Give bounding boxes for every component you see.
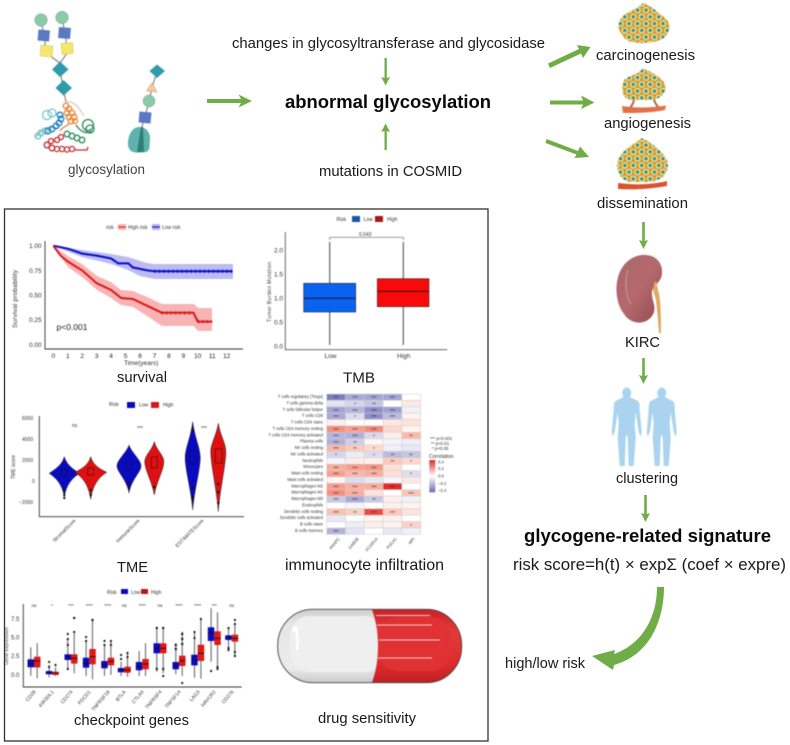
legend: checkpoint: Risk	[107, 590, 117, 596]
row labels: Macrophages M0	[291, 496, 324, 501]
significance stars: ***	[333, 440, 339, 445]
significance stars: ***	[333, 427, 339, 432]
significance stars: ***	[371, 466, 377, 470]
column labels: FCGR1A	[364, 536, 379, 552]
chart: checkpoint gene boxplots: 7.5	[11, 617, 20, 623]
row labels: T cells follicular helper	[283, 407, 324, 412]
significance stars: *	[373, 452, 375, 458]
icon: carcinogenesis cell cluster	[618, 3, 670, 43]
significance stars: ***	[352, 466, 358, 470]
boxes: TNFRSF18	[101, 640, 114, 676]
significance stars: ***	[371, 484, 377, 490]
gene labels	[25, 689, 236, 713]
significance labels: ns	[229, 603, 235, 608]
violins: ESTIMATEScore	[185, 422, 226, 512]
significance stars: ***	[333, 484, 339, 490]
significance labels: ****	[175, 603, 183, 608]
significance stars: **	[353, 446, 357, 451]
chart: survival curves: 10	[194, 353, 202, 360]
boxes: HAVCR2	[208, 608, 221, 672]
significance stars: ***	[371, 414, 377, 419]
significance stars: **	[409, 452, 413, 458]
row labels: T cells CD4 memory resting	[273, 426, 324, 431]
chart: survival curves: 4	[109, 353, 113, 360]
arrow: to angiogenesis	[550, 96, 594, 109]
significance stars: ***	[352, 472, 358, 476]
arrow: to carcinogenesis	[548, 45, 590, 68]
row labels: T cells regulatory (Tregs)	[278, 394, 324, 399]
legend: survival	[106, 224, 181, 231]
chart: TME violin plot: ***	[201, 426, 207, 432]
boxes: CD276	[225, 619, 238, 657]
chart: checkpoint gene boxplots: 5.0	[11, 636, 20, 642]
chart: TME violin plot: StromalScore	[52, 518, 78, 544]
label: drug sensitivity: drug sensitivity	[318, 711, 417, 727]
row labels: Mast cells activated	[287, 477, 324, 482]
significance labels	[32, 603, 235, 608]
significance labels: ***	[212, 603, 217, 608]
significance stars: ***	[333, 395, 339, 400]
chart: survival curves: 8	[167, 353, 171, 360]
curve: high risk	[53, 246, 212, 322]
label: TMB: TMB	[343, 370, 375, 386]
label: carcinogenesis: carcinogenesis	[596, 48, 695, 64]
significance stars: ***	[390, 484, 395, 490]
significance stars: **	[372, 497, 376, 502]
significance stars: ***	[352, 491, 358, 496]
significance stars	[333, 395, 414, 534]
significance stars: ***	[352, 427, 358, 432]
chart: survival curves: Time(years)	[124, 360, 158, 367]
icon: drug capsule	[277, 609, 462, 683]
icon: O-glycan on barrel protein	[128, 64, 165, 153]
significance stars: ***	[390, 414, 395, 419]
legend: TME: Risk	[109, 402, 119, 408]
significance stars: ***	[333, 510, 339, 515]
legend: significance	[430, 436, 453, 451]
label: TME: TME	[117, 560, 148, 576]
chart: survival curves: 0.50	[29, 292, 42, 300]
legend: TMB	[336, 216, 398, 223]
significance stars: ***	[333, 497, 339, 502]
violins: StromalScore	[49, 457, 107, 499]
column labels: GAB2B	[347, 536, 360, 550]
gene labels: TNFRSF18	[91, 689, 112, 713]
chart: survival curves: 12	[223, 353, 231, 360]
gene labels: BTLA	[115, 689, 128, 703]
column labels	[328, 536, 416, 552]
significance stars: ***	[371, 472, 377, 476]
label: clustering: clustering	[616, 471, 678, 487]
legend: checkpoint: Low	[131, 590, 141, 596]
arrow: to signature	[641, 495, 650, 522]
curve: low risk	[53, 246, 232, 271]
label: glycosylation: glycosylation	[68, 162, 145, 177]
row labels: T cells CD4 naive	[291, 420, 324, 424]
significance stars: *	[373, 434, 375, 438]
significance stars: ***	[352, 395, 358, 400]
gene labels: CTLA4	[131, 689, 146, 705]
legend: survival: High risk	[128, 225, 148, 231]
significance stars: ***	[371, 408, 377, 413]
legend: checkpoint	[107, 589, 162, 596]
gene labels: CD28	[25, 689, 38, 703]
significance stars: *	[410, 459, 412, 464]
legend: TME: Low	[139, 402, 149, 408]
chart: TME violin plot: ns	[72, 423, 78, 429]
significance stars: *	[354, 402, 356, 406]
chart: survival curves: 0.25	[29, 317, 42, 324]
row labels: Mast cells resting	[291, 471, 324, 476]
boxes: CD274	[64, 617, 78, 673]
chart: survival curves: 0.00	[29, 342, 42, 349]
row labels: Plasma cells	[300, 439, 323, 444]
legend: significance: ** p<0.01	[431, 441, 450, 446]
icon: glycosylated protein with branched glycan	[35, 11, 94, 152]
arrow: to clustering	[639, 358, 648, 384]
chart: survival curves: 1.00	[29, 243, 42, 250]
row labels: T cells gamma delta	[286, 400, 324, 405]
significance stars: ***	[333, 434, 339, 438]
legend: checkpoint: High	[151, 590, 162, 596]
gene labels: HAVCR2	[200, 689, 218, 709]
arrow: curved to high/low risk	[592, 587, 664, 670]
significance stars: **	[353, 440, 357, 445]
chart: checkpoint gene boxplots: 0.0	[11, 673, 20, 679]
legend: correlation colour bar: 0.2	[438, 466, 444, 471]
chart: survival curves: 1	[66, 353, 70, 360]
heading: glycogene-related signature: glycogene-related signature	[524, 525, 771, 546]
significance stars: **	[353, 510, 357, 515]
label: angiogenesis: angiogenesis	[604, 116, 691, 132]
chart: TMB boxplot: 1.5	[274, 272, 283, 278]
y axis title: TME score	[11, 455, 17, 479]
significance labels: ****	[139, 603, 146, 608]
y axis title: Tumor Burden Mutation	[267, 262, 273, 322]
legend: correlation colour bar: 0.0	[438, 474, 444, 478]
significance stars: ***	[333, 529, 339, 534]
violins: ImmuneScore	[117, 442, 164, 495]
boxes: LAG3	[191, 618, 204, 679]
row labels: Neutrophils	[302, 458, 323, 463]
label: survival: survival	[117, 370, 167, 386]
label: immunocyte infiltration: immunocyte infiltration	[285, 557, 444, 574]
chart: checkpoint gene boxplots: 2.5	[11, 654, 20, 660]
chart: survival curves: 11	[209, 353, 216, 360]
gene labels: TNFSF14	[164, 689, 183, 710]
row labels: B cells memory	[295, 528, 324, 533]
chart: checkpoint gene boxplots	[4, 589, 242, 713]
row labels: Dendritic cells activated	[280, 515, 324, 520]
boxes: PDCD1	[83, 619, 96, 679]
chart: TME violin plot: ***	[137, 426, 143, 432]
significance labels: ****	[104, 603, 111, 608]
heading: abnormal glycosylation: abnormal glycosylation	[285, 91, 491, 112]
chart: TMB boxplot: Low	[324, 353, 337, 360]
legend: TMB: Risk	[336, 217, 347, 223]
legend: correlation colour bar	[429, 454, 454, 493]
chart: survival curves: 6	[138, 353, 142, 360]
gene labels: CD274	[60, 689, 75, 705]
significance stars: *	[335, 452, 337, 458]
significance stars: **	[372, 402, 376, 406]
significance labels: ns	[158, 603, 163, 608]
row labels: Eosinophils	[302, 502, 323, 508]
chart: TMB boxplot: 0.5	[274, 320, 283, 326]
y axis title: Survival probability	[12, 269, 19, 328]
arrow: to dissemination	[546, 139, 589, 158]
row labels: Macrophages M1	[291, 490, 324, 495]
significance stars: *	[410, 472, 412, 476]
significance stars: ***	[333, 472, 339, 476]
boxes: TNFRSF4	[154, 627, 166, 677]
chart: survival curves: 0.75	[29, 268, 42, 275]
boxes: CD28	[28, 643, 40, 678]
icon: angiogenesis cell cluster with vessel	[622, 68, 666, 113]
row labels: NK cells activated	[290, 451, 324, 456]
row labels: B cells naive	[300, 522, 324, 527]
chart: TME violin plot: 4000	[22, 437, 33, 443]
significance stars: ***	[333, 446, 339, 451]
gene labels: PDCD1	[77, 689, 93, 706]
icon: dissemination cell cluster with vessel	[617, 138, 668, 189]
arrow: up to abnormal glycosylation	[381, 124, 390, 150]
panel: analyses frame	[4, 209, 488, 741]
chart: TMB boxplot: 0.0	[274, 344, 283, 350]
significance labels: ****	[194, 603, 201, 608]
significance stars: *	[410, 523, 412, 528]
label: checkpoint genes: checkpoint genes	[74, 713, 189, 729]
chart: TME violin plot: 6000	[22, 416, 33, 422]
chart: TMB boxplot: 2.0	[274, 248, 283, 254]
significance stars: **	[391, 459, 394, 464]
arrow: to kidney	[639, 222, 648, 249]
violin outliers	[63, 429, 219, 504]
axes	[45, 241, 243, 349]
label: high/low risk: high/low risk	[505, 656, 586, 672]
label: KIRC: KIRC	[625, 335, 660, 351]
legend: TMB: High	[387, 217, 398, 223]
significance stars: ***	[371, 427, 377, 432]
legend: correlation colour bar: −0.4	[438, 488, 447, 493]
boxes: CTLA4	[136, 643, 149, 676]
boxes: TNFSF14	[172, 632, 186, 684]
gene labels: CD276	[221, 689, 236, 705]
significance labels: *	[51, 603, 53, 608]
y axis title: Gene expression	[4, 627, 10, 665]
confidence bands	[53, 245, 233, 279]
significance stars: *	[354, 414, 356, 419]
significance labels: ***	[68, 603, 74, 608]
legend: correlation colour bar: Correlation	[429, 454, 454, 460]
chart: TME violin plot: 0	[32, 479, 35, 485]
chart: TME violin plot: ImmuneScore	[115, 518, 142, 544]
p value: p<0.001	[56, 322, 88, 332]
gene labels: KIR3DL1	[38, 689, 56, 709]
row labels: NK cells resting	[295, 445, 324, 450]
significance labels: ****	[86, 603, 93, 608]
legend: TME	[109, 402, 174, 408]
significance stars: ***	[371, 510, 377, 515]
significance stars: **	[409, 434, 413, 438]
chart: survival curves: 3	[95, 353, 99, 360]
chart: TME violin plot: 2000	[22, 458, 33, 464]
significance stars: **	[391, 452, 394, 458]
heatmap cells	[327, 394, 421, 534]
significance stars: ***	[371, 395, 377, 400]
legend: survival: risk	[106, 225, 114, 231]
legend: correlation colour bar: −0.2	[438, 481, 447, 486]
significance stars: *	[373, 446, 375, 451]
row labels: Dendritic cells resting	[284, 509, 324, 514]
chart: TMB boxplot: 1.0	[274, 296, 283, 302]
significance stars: ***	[333, 491, 339, 496]
significance stars: ***	[352, 434, 358, 438]
significance stars: ***	[352, 497, 358, 502]
icon: kidney	[616, 255, 662, 333]
significance stars: ***	[333, 414, 339, 419]
legend: significance: *** p<0.001	[430, 436, 453, 441]
chart: survival curves: 5	[124, 353, 128, 360]
boxes: KIR3DL1	[46, 661, 59, 677]
icon: two human silhouettes	[612, 388, 677, 466]
legend: TME: High	[163, 402, 174, 408]
row labels: T cells CD4 memory activated	[268, 432, 324, 437]
arrow: down to abnormal glycosylation	[381, 58, 390, 86]
row labels	[268, 394, 324, 533]
chart: survival curves: 9	[182, 353, 186, 360]
chart: immunocyte heatmap	[268, 394, 454, 552]
gene labels: LAG3	[189, 689, 202, 703]
significance labels: ns	[122, 603, 127, 608]
arrow: glycosylation to abnormal glycosylation	[207, 94, 252, 108]
legend: correlation colour bar: 0.4	[438, 460, 444, 464]
chart: survival curves: 7	[153, 353, 157, 360]
boxes: BTLA	[118, 652, 131, 677]
significance stars: ***	[390, 395, 395, 400]
chart: survival curves: 2	[80, 353, 84, 360]
chart: TMB boxplot	[267, 216, 447, 360]
chart: TME violin plot: ESTIMATEScore	[175, 518, 206, 549]
significance stars: ***	[390, 408, 395, 413]
significance stars: ***	[333, 466, 339, 470]
chart: survival curves	[12, 224, 243, 367]
legend: significance: * p<0.05	[432, 446, 449, 451]
row labels: Monocytes	[303, 464, 323, 469]
chart: TME violin plot: −2000	[19, 500, 33, 506]
text: changes in enzymes: changes in glycosyltransferase and glycosidase	[232, 35, 545, 52]
legend: TMB: Low	[364, 217, 373, 223]
legend: survival: Low risk	[162, 225, 181, 231]
chart: TMB boxplot: 0.043	[359, 232, 372, 238]
significance stars: ***	[408, 491, 414, 496]
text: mutations in COSMID: mutations in COSMID	[319, 164, 462, 180]
significance stars: ***	[333, 408, 339, 413]
chart: survival curves: 0	[51, 353, 55, 360]
formula: risk score: risk score=h(t) × expΣ (coef × expre)	[513, 555, 786, 574]
significance stars: ***	[352, 408, 358, 413]
significance stars: ***	[352, 484, 358, 490]
significance stars: ***	[390, 510, 395, 515]
column labels: ANAPC	[328, 536, 341, 550]
label: dissemination: dissemination	[597, 196, 688, 212]
column labels: MPI	[407, 536, 416, 545]
chart: TMB boxplot: High	[397, 353, 411, 360]
row labels: T cells CD8	[302, 413, 324, 418]
significance labels: ns	[32, 603, 37, 608]
chart: TME violin plot	[11, 402, 244, 549]
row labels: Macrophages M2	[291, 483, 324, 488]
gene labels: TNFRSF4	[144, 689, 164, 711]
column labels: FUCA1	[385, 536, 398, 550]
